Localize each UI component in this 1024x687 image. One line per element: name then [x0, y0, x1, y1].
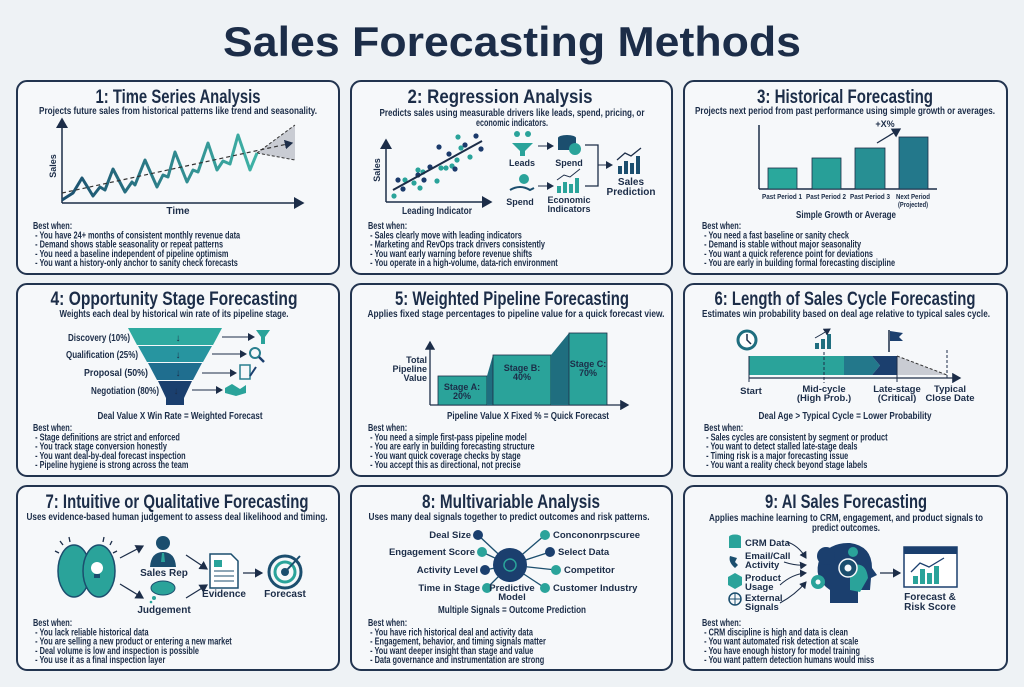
best when list: Best when:	[33, 220, 72, 231]
timeline diagram: Mid-cycle	[802, 384, 846, 395]
line chart	[48, 119, 303, 217]
subtitle	[380, 108, 645, 129]
timeline diagram: Close Date	[925, 393, 975, 404]
network diagram: Select Data	[558, 547, 610, 558]
scatter chart: Leading Indicator	[402, 206, 472, 217]
best when list: - You have enough history for model training	[704, 645, 860, 656]
flow diagram: Judgement	[137, 605, 191, 616]
best when list: - You use it as a final inspection layer	[35, 654, 166, 666]
heading: time series: 1: Time Series Analysis	[96, 87, 260, 108]
bar chart: Past Period 1	[762, 192, 802, 201]
driver icons diagram: Spend	[506, 197, 534, 207]
driver icons diagram: Sales	[618, 177, 645, 188]
funnel diagram	[66, 328, 270, 422]
network diagram: Competitor	[564, 565, 615, 576]
step chart: Stage A:	[444, 382, 480, 392]
best when list: - You have 24+ months of consistent monthly revenue data	[35, 229, 241, 241]
step chart: Pipeline	[392, 364, 427, 374]
best when list: - You have rich historical deal and activity data	[370, 626, 534, 638]
bar chart: (Projected)	[898, 200, 928, 209]
network diagram: Predictive	[489, 583, 535, 594]
network diagram: Customer Industry	[553, 583, 638, 594]
best when list	[33, 220, 241, 269]
subtitle: Uses evidence-based human judgement to assess deal likelihood and timing.	[26, 512, 328, 523]
best when list: - You want pattern detection humans would miss	[704, 654, 874, 666]
heading: historical: 3: Historical Forecasting	[757, 87, 933, 108]
best when list: - You need a baseline independent of pipeline optimism	[35, 248, 228, 259]
heading: opportunity stage: 4: Opportunity Stage Forecasting	[50, 289, 298, 310]
flow diagram	[55, 536, 307, 616]
funnel diagram: Deal Value X Win Rate = Weighted Forecast	[98, 411, 263, 422]
network diagram: Engagement Score	[389, 547, 475, 558]
heading: regression: 2: Regression Analysis	[408, 87, 592, 108]
title: Sales Forecasting Methods	[223, 18, 801, 65]
best when list: - Stage definitions are strict and enforced	[35, 431, 180, 443]
best when list: - Data governance and instrumentation are strong	[370, 654, 544, 666]
bar chart	[759, 119, 937, 221]
best when list: - Demand is stable without major seasonality	[704, 238, 861, 250]
subtitle: Projects future sales from historical patterns like trend and seasonality.	[39, 106, 317, 117]
funnel diagram: ↓	[176, 333, 180, 344]
best when list: Best when:	[33, 422, 72, 433]
best when list: - You want quick coverage checks by stage	[370, 450, 521, 461]
best when list: - Demand shows stable seasonality or repeat patterns	[35, 238, 223, 250]
network diagram	[389, 530, 640, 616]
scatter chart: Sales	[372, 158, 382, 182]
best when list	[33, 422, 188, 471]
network diagram: Multiple Signals = Outcome Prediction	[438, 605, 586, 616]
network diagram: Deal Size	[429, 530, 471, 541]
funnel diagram: Negotiation (80%)	[91, 386, 159, 397]
panel: 6 sales cycle	[684, 284, 1007, 476]
subtitle: Weights each deal by historical win rate of its pipeline stage.	[60, 309, 289, 320]
best when list: Best when:	[33, 617, 72, 628]
subtitle: Applies fixed stage percentages to pipeline value for a quick forecast view.	[368, 309, 665, 320]
timeline diagram: Typical	[934, 384, 966, 395]
heading: multivariable: 8: Multivariable Analysis	[422, 492, 600, 513]
timeline diagram: Start	[740, 386, 763, 397]
best when list	[368, 220, 558, 269]
best when list: - You need a simple first-pass pipeline model	[370, 431, 527, 443]
network diagram: Activity Level	[417, 565, 478, 576]
best when list: - CRM discipline is high and data is clean	[704, 626, 848, 638]
network diagram: Time in Stage	[418, 583, 480, 594]
subtitle: Uses many deal signals together to predict outcomes and risk patterns.	[368, 512, 650, 523]
subtitle: economic indicators.	[476, 118, 548, 129]
AI diagram: Activity	[745, 560, 780, 571]
funnel diagram: ↓	[174, 386, 178, 397]
heading: weighted pipeline: 5: Weighted Pipeline Forecasting	[395, 289, 629, 310]
best when list	[702, 617, 874, 666]
best when list: - You want a quick reference point for deviations	[704, 248, 873, 259]
driver icons diagram	[506, 131, 655, 214]
line chart: Sales	[48, 154, 58, 178]
step chart: 40%	[513, 372, 531, 382]
AI diagram: External	[745, 593, 782, 604]
timeline diagram: (Critical)	[878, 393, 916, 404]
driver icons diagram: Leads	[509, 158, 535, 168]
best when list: - You want early warning before revenue shifts	[370, 248, 532, 259]
best when list: - You are early in building formal forecasting discipline	[704, 257, 895, 269]
best when list: - Sales clearly move with leading indicators	[370, 229, 522, 241]
best when list: - You accept this as directional, not precise	[370, 459, 521, 471]
panel: 5 weighted pipeline	[351, 284, 672, 476]
best when list: - You track stage conversion honestly	[35, 440, 167, 452]
bar chart: Past Period 2	[806, 192, 846, 201]
step chart: Pipeline Value X Fixed % = Quick Forecast	[447, 411, 610, 422]
best when list: Best when:	[702, 220, 741, 231]
flow diagram: Sales Rep	[140, 568, 188, 579]
flow diagram: Evidence	[202, 589, 246, 600]
funnel diagram: ↓	[176, 368, 180, 379]
best when list: - You want automated risk detection at scale	[704, 635, 858, 647]
panel: 3 historical	[684, 81, 1007, 274]
best when list: - Marketing and RevOps track drivers consistently	[370, 238, 545, 250]
step chart: Total	[406, 355, 427, 365]
subtitle	[709, 513, 983, 534]
best when list: Best when:	[702, 617, 741, 628]
AI diagram: Product	[745, 573, 782, 584]
step chart: 20%	[453, 391, 471, 401]
panel: 7 intuitive	[17, 486, 339, 670]
best when list	[368, 617, 546, 666]
flow diagram: Forecast	[264, 589, 307, 600]
best when list: Best when:	[704, 422, 743, 433]
timeline diagram: Late-stage	[873, 384, 921, 395]
panel: 8 multivariable	[351, 486, 672, 670]
step chart: Stage B:	[504, 363, 540, 373]
step chart: Stage C:	[570, 359, 606, 369]
driver icons diagram: Indicators	[547, 204, 591, 214]
subtitle: predict outcomes.	[812, 523, 880, 534]
timeline diagram	[738, 329, 975, 422]
AI diagram: Risk Score	[904, 602, 956, 613]
funnel diagram: Proposal (50%)	[84, 368, 148, 379]
bar chart: Next Period	[896, 192, 930, 201]
timeline diagram: (High Prob.)	[797, 393, 851, 404]
driver icons diagram: Economic	[547, 195, 591, 205]
best when list: - You are selling a new product or entering a new market	[35, 635, 232, 647]
AI diagram: Usage	[745, 582, 774, 593]
AI diagram: Signals	[745, 602, 779, 613]
best when list	[33, 617, 232, 666]
best when list: - You lack reliable historical data	[35, 626, 149, 638]
best when list	[702, 220, 895, 269]
best when list: - Timing risk is a major forecasting issue	[706, 450, 848, 461]
best when list: - Pipeline hygiene is strong across the team	[35, 459, 188, 471]
driver icons diagram: Spend	[555, 158, 583, 168]
timeline diagram: Deal Age > Typical Cycle = Lower Probability	[758, 411, 932, 422]
best when list: - You operate in a high-volume, data-rich environment	[370, 257, 558, 269]
heading: AI: 9: AI Sales Forecasting	[765, 492, 927, 513]
AI diagram: CRM Data	[745, 538, 791, 549]
panel: 4 opportunity stage	[17, 284, 339, 476]
subtitle: Predicts sales using measurable drivers like leads, spend, pricing, or	[380, 108, 645, 119]
best when list: - Sales cycles are consistent by segment or product	[706, 431, 888, 443]
panel: 2 regression	[351, 81, 672, 274]
best when list: - You want a history-only anchor to sanity check forecasts	[35, 257, 238, 269]
network diagram: Model	[498, 592, 526, 603]
driver icons diagram: Prediction	[607, 187, 655, 198]
best when list	[368, 422, 535, 471]
best when list: Best when:	[368, 422, 407, 433]
AI diagram: Email/Call	[745, 551, 790, 562]
best when list	[704, 422, 888, 471]
bar chart: +X%	[875, 119, 895, 129]
line chart: Time	[166, 206, 190, 217]
best when list: - You want deeper insight than stage and value	[370, 645, 533, 656]
best when list: Best when:	[368, 220, 407, 231]
best when list: - You need a fast baseline or sanity check	[704, 229, 850, 241]
best when list: - Engagement, behavior, and timing signals matter	[370, 635, 546, 647]
funnel diagram: ↓	[176, 350, 180, 361]
step chart	[392, 333, 628, 422]
network diagram: Concononrpscuree	[553, 530, 640, 541]
heading: intuitive: 7: Intuitive or Qualitative Forecasting	[46, 492, 308, 513]
best when list: Best when:	[368, 617, 407, 628]
best when list: - You want a reality check beyond stage labels	[706, 459, 867, 471]
panel: 9 AI forecasting	[684, 486, 1007, 670]
step chart: Value	[403, 373, 427, 383]
AI diagram	[728, 534, 957, 613]
AI diagram: Forecast &	[904, 592, 956, 603]
panel: 1 time series	[17, 81, 339, 274]
funnel diagram: Discovery (10%)	[68, 333, 130, 344]
scatter chart	[372, 133, 491, 217]
step chart: 70%	[579, 368, 597, 378]
best when list: - You want to detect stalled late-stage deals	[706, 440, 858, 452]
bar chart: Past Period 3	[850, 192, 890, 201]
best when list: - You want deal-by-deal forecast inspection	[35, 450, 186, 461]
best when list: - Deal volume is low and inspection is possible	[35, 645, 199, 656]
funnel diagram: Qualification (25%)	[66, 350, 138, 361]
bar chart: Simple Growth or Average	[796, 210, 896, 221]
best when list: - You are early in building forecasting structure	[370, 440, 535, 452]
